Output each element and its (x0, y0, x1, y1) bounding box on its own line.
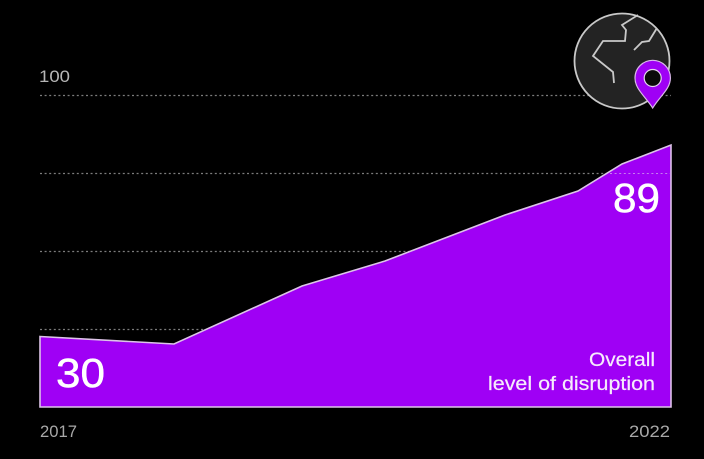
series label: overall level of disruption: level of disruption (488, 373, 655, 395)
x-axis label: 2017: 2017 (40, 422, 77, 441)
x-axis label: 2022: 2022 (629, 422, 670, 441)
value: 89: 89 (613, 175, 660, 221)
purple area series (40, 145, 671, 407)
icon: globe with location pin (574, 14, 670, 108)
series label: overall level of disruption (488, 349, 655, 395)
y-axis label: 100: 100 (39, 67, 70, 86)
series label: overall level of disruption: Overall (589, 349, 655, 371)
value: 30: 30 (56, 350, 105, 396)
gridline overlay on area (610, 172, 670, 174)
